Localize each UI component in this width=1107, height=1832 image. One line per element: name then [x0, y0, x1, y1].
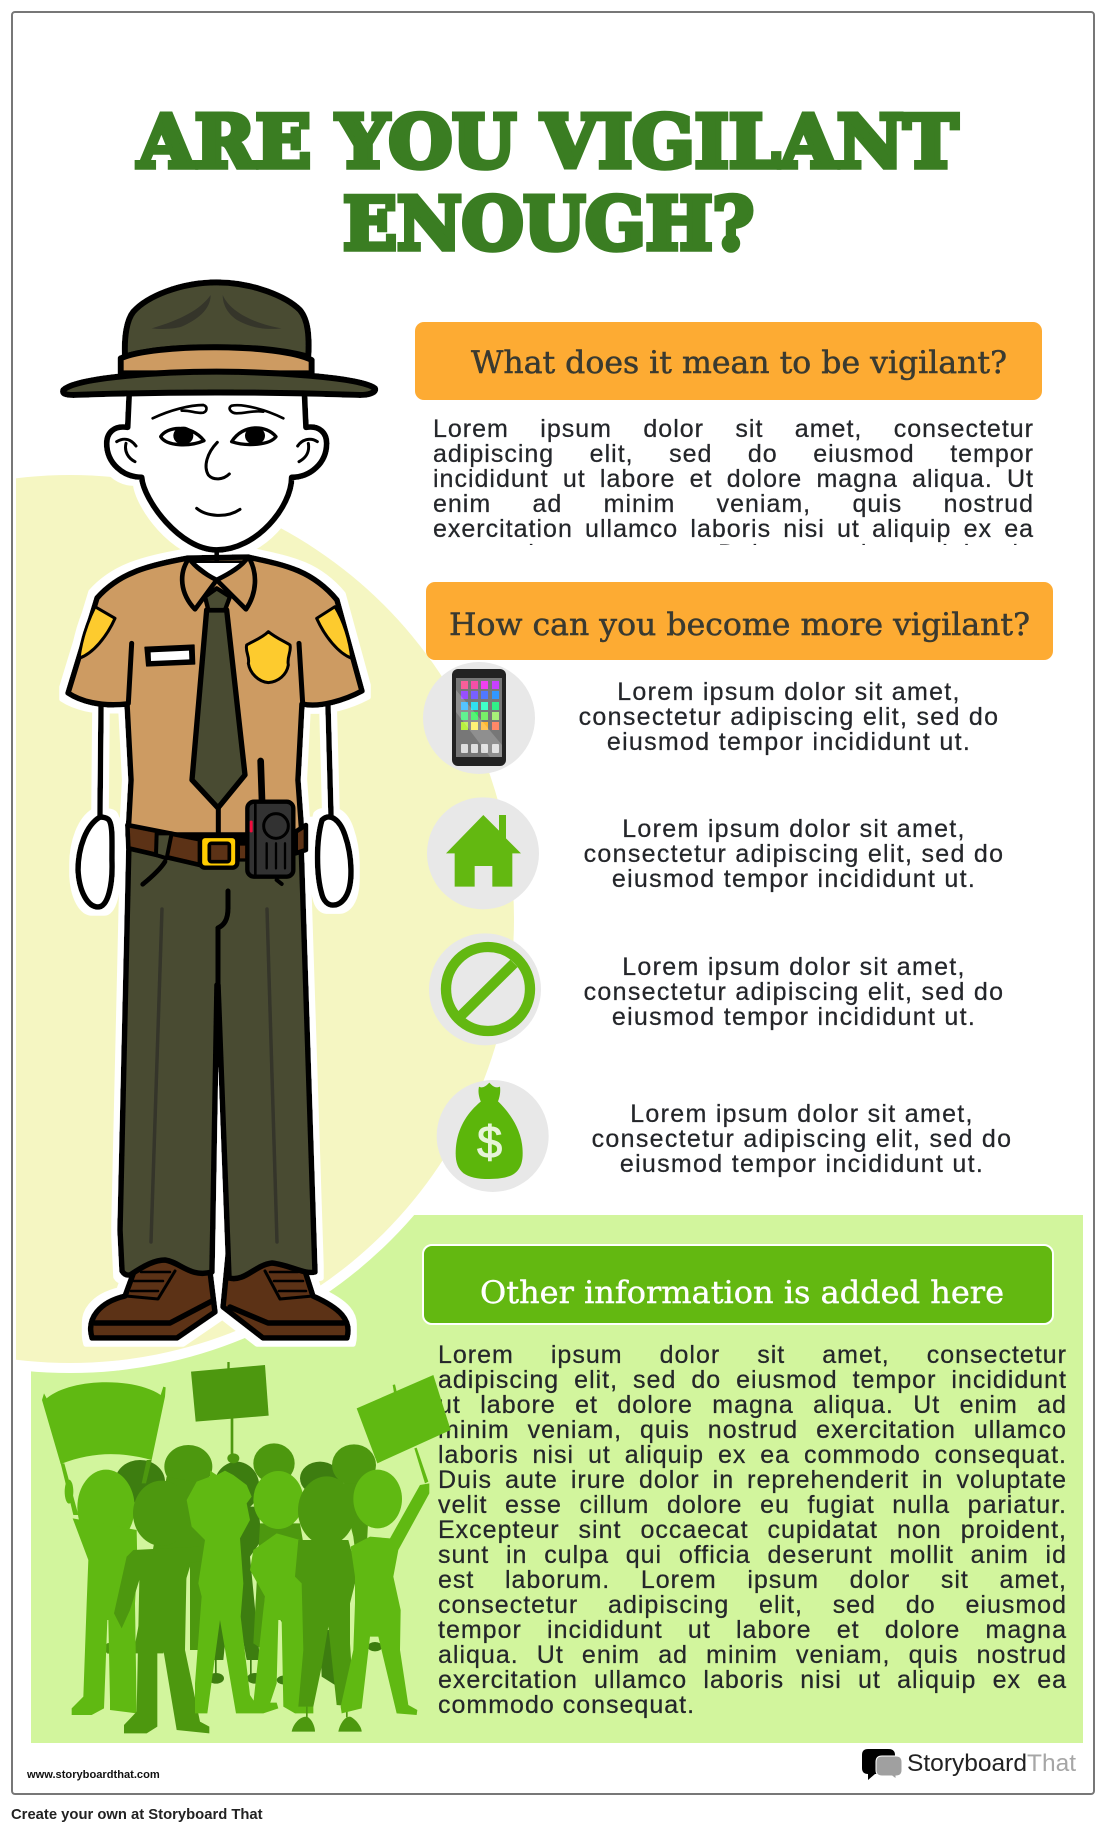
- text block: other information body: sunt in culpa qui officia deserunt mollit anim id: [438, 1541, 1067, 1569]
- right shoe: [223, 1255, 348, 1338]
- logo: Storyboard That: [862, 1749, 1076, 1780]
- figure with round hair: [250, 1471, 313, 1713]
- text block: other information body: consectetur adipiscing elit, sed do eiusmod: [438, 1591, 1067, 1619]
- text block: other information body: tempor incididunt ut labore et dolore magna: [438, 1616, 1067, 1644]
- icon: money bag: [437, 1080, 549, 1192]
- large pale circle with white ring: [0, 0, 524, 1832]
- text block: other information body: velit esse cillum dolore eu fugiat nulla pariatur.: [438, 1491, 1067, 1519]
- head and face: [107, 390, 327, 560]
- shirt details: collar, tie, badge, tag, epaulets: [79, 557, 352, 808]
- text block: other information body: ut labore et dolore magna aliqua. Ut enim ad: [438, 1391, 1067, 1419]
- illustration: protest crowd silhouette: [42, 1362, 451, 1733]
- text block: tip one: [579, 678, 999, 756]
- text block: tip four: Lorem ipsum dolor sit amet,: [630, 1100, 974, 1128]
- text block: tip three: Lorem ipsum dolor sit amet,: [622, 953, 966, 981]
- right arm and hand: [318, 705, 351, 905]
- trousers: [120, 840, 315, 1279]
- text block: other information body: Duis aute irure dolor in reprehenderit in voluptate: [438, 1466, 1067, 1494]
- website credit: www.storyboardthat.com: [27, 1769, 160, 1781]
- front right figure: [292, 1476, 362, 1732]
- belt, buckle and radio: [127, 761, 306, 884]
- illustration: park ranger character: [63, 282, 375, 1338]
- text block: tip two: Lorem ipsum dolor sit amet,: [622, 815, 966, 843]
- icon: money bag: $: [477, 1116, 502, 1167]
- text block: what it means: exercitation ullamco laboris nisi ut aliquip ex ea: [433, 515, 1034, 543]
- title: ARE YOU VIGILANT: [137, 99, 958, 184]
- text block: tip one: eiusmod tempor incididunt ut.: [607, 728, 971, 756]
- text block: what it means: adipiscing elit, sed do eiusmod tempor: [433, 440, 1034, 468]
- heading box: what does it mean: [415, 322, 1042, 400]
- spiky hair figure: [187, 1471, 278, 1713]
- text block: other information body: Excepteur sint occaecat cupidatat non proident,: [438, 1516, 1067, 1544]
- text block: tip three: [584, 953, 1004, 1031]
- text block: tip two: [584, 815, 1004, 893]
- text block: other information body: est laborum. Lorem ipsum dolor sit amet,: [438, 1566, 1067, 1594]
- back row figures: [115, 1460, 382, 1685]
- figure with raised arm and sign: [341, 1375, 451, 1715]
- heading box: how can you become more vigilant: How can you become more vigilant?: [449, 607, 1030, 643]
- text block: tip four: [592, 1100, 1012, 1178]
- text block: other information body: minim veniam, quis nostrud exercitation ullamco: [438, 1416, 1067, 1444]
- text block: what it means: enim ad minim veniam, quis nostrud: [433, 490, 1034, 518]
- text block: tip two: eiusmod tempor incididunt ut.: [612, 865, 976, 893]
- heading box: how can you become more vigilant: [426, 582, 1053, 660]
- footer call to action: Create your own at Storyboard That: [11, 1807, 263, 1823]
- ranger hat: [63, 282, 375, 395]
- text block: other information body: commodo consequat.: [438, 1691, 695, 1719]
- title: ENOUGH?: [343, 181, 754, 266]
- text block: tip three: consectetur adipiscing elit, sed do: [584, 978, 1004, 1006]
- text block: tip two: consectetur adipiscing elit, sed do: [584, 840, 1004, 868]
- panel: other information background: [31, 1215, 1083, 1743]
- text block: tip one: Lorem ipsum dolor sit amet,: [617, 678, 961, 706]
- text block: other information body: laboris nisi ut aliquip ex ea commodo consequat.: [438, 1441, 1067, 1469]
- title: [137, 99, 958, 266]
- text block: other information body: adipiscing elit, sed do eiusmod tempor incididunt: [438, 1366, 1067, 1394]
- figure with banner: [42, 1382, 166, 1715]
- heading box: other information: [423, 1245, 1053, 1324]
- left arm and hand: [78, 705, 112, 907]
- shirt: [68, 557, 362, 835]
- text block: other information body: [438, 1343, 1067, 1719]
- left shoe: [91, 1255, 215, 1338]
- text block: other information body: aliqua. Ut enim ad minim veniam, quis nostrud: [438, 1641, 1067, 1669]
- text block: other information body: exercitation ullamco laboris nisi ut aliquip ex ea: [438, 1666, 1067, 1694]
- icon: prohibition sign: [429, 933, 541, 1045]
- text block: tip three: eiusmod tempor incididunt ut.: [612, 1003, 976, 1031]
- text block: what it means: incididunt ut labore et dolore magna aliqua. Ut: [433, 465, 1034, 493]
- logo: Storyboard That: That: [1027, 1750, 1076, 1777]
- text block: tip four: consectetur adipiscing elit, sed do: [592, 1125, 1012, 1153]
- icon: smartphone: [423, 662, 535, 774]
- logo: Storyboard That: Storyboard: [907, 1750, 1027, 1777]
- heading box: what does it mean: What does it mean to be vigilant?: [471, 345, 1007, 381]
- text block: tip four: eiusmod tempor incididunt ut.: [620, 1150, 984, 1178]
- text block: what it means: [433, 417, 1034, 545]
- heading box: other information: Other information is added here: [480, 1275, 1004, 1311]
- saluting figure: [114, 1481, 222, 1733]
- icon: house: [427, 797, 539, 909]
- text block: tip one: consectetur adipiscing elit, sed do: [579, 703, 999, 731]
